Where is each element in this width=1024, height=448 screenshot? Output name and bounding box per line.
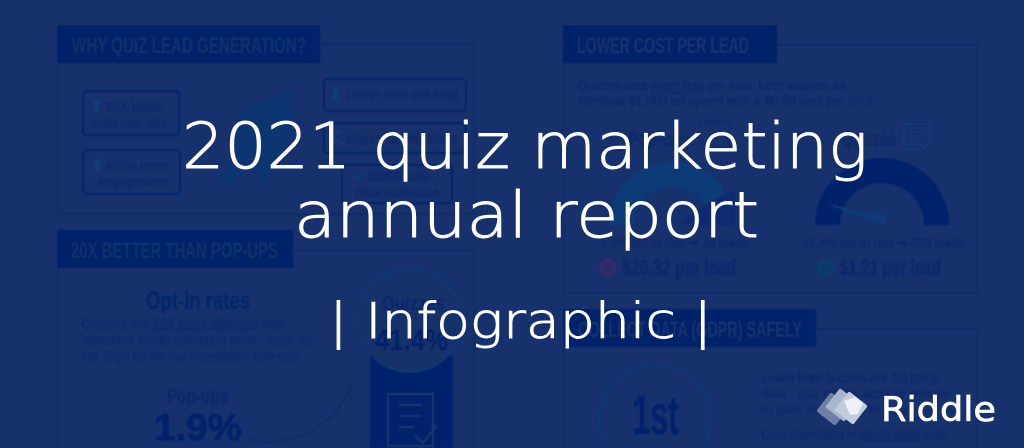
label: pop-ups (628, 122, 728, 151)
badge: quizzes rate: 41.4% (375, 324, 448, 357)
text: first party paragraph: data - quiz takers actively choose (761, 387, 950, 401)
heading: why quiz lead generation (57, 25, 320, 63)
callout: 20X better than pop-ups: 20X better (105, 100, 165, 114)
callout: 20X better than pop-ups (83, 91, 179, 135)
callout: lower cost per lead (324, 79, 466, 111)
label: quizzes (842, 124, 932, 151)
callout: GDPR-safe data collection: GDPR-safe (368, 170, 430, 184)
result: quizzes cost (817, 255, 941, 280)
callout: 20X better than pop-ups: than pop-ups (92, 116, 167, 130)
text: first party paragraph: Quiz marketing is much safer than (761, 428, 948, 442)
heading: collect data safely (563, 309, 816, 347)
title: annual report (294, 179, 759, 252)
panel: lower cost per lead (563, 25, 978, 293)
result: pop-ups cost: $26.32 per lead (622, 255, 736, 280)
badge: quizzes rate (358, 268, 462, 372)
bar: quizzes rate (370, 355, 453, 448)
badge: 1st party data: 1st (632, 383, 679, 446)
callout: higher quality leads (324, 123, 465, 153)
text: opt-in paragraph: 'standard' email collection tools - such as (81, 333, 312, 347)
heading: collect data safely: COLLECT DATA (GDPR) SAFELY (578, 317, 802, 342)
text: opt-in paragraph: the 'Sign up for our newsletter' pop-ups. (81, 349, 302, 363)
callout: 400% more engagement (83, 150, 180, 194)
heading: 20x better than pop-ups (57, 230, 293, 268)
text: first party paragraph (761, 371, 950, 442)
text: opt-in paragraph (81, 317, 312, 363)
heading: opt-in rates: Opt-in rates (146, 287, 250, 315)
gauge: pop-ups (609, 162, 735, 225)
callout: GDPR-safe data collection (342, 165, 452, 203)
text: intro (578, 79, 877, 108)
result: quizzes cost: $1.21 per lead (840, 255, 941, 280)
text: first party paragraph: Leads from quizzes are 1st party (761, 371, 939, 385)
arrow: pop-ups to quizzes (250, 386, 352, 442)
badge: quizzes rate: Quizzes (382, 293, 445, 315)
label: pop-ups rate: Pop-ups (167, 386, 228, 408)
text: intro: identical $1,000 ad spend with a $0.50 cost per click. (578, 94, 877, 108)
gauge: quizzes (815, 158, 949, 225)
text: opt-in paragraph: Quizzes are 20X more effective than (81, 317, 287, 331)
panel: collect data safely (563, 309, 978, 447)
label: pop-ups: Pop-ups (628, 129, 690, 151)
callout: lower cost per lead: Lower cost per lead (346, 88, 458, 102)
subtitle: | Infographic | (329, 293, 712, 350)
callout: 400% more engagement: engagement (98, 175, 169, 189)
title (182, 110, 868, 252)
callout: higher quality leads: Higher quality leads (347, 132, 457, 146)
callout: GDPR-safe data collection: data collection (355, 186, 440, 200)
logo: Riddle (816, 388, 996, 430)
stat: quizzes opt-in: 41.4% opt-in rate ➡ 828 leads (802, 236, 964, 250)
panel: 20x better than pop-ups (57, 230, 474, 448)
panel: why quiz lead generation (57, 25, 474, 214)
logo: Riddle: Riddle (881, 390, 996, 430)
stat: pop-ups opt-in: 1.9% opt-in rate ➡ 38 leads (600, 236, 748, 250)
icon: rocket (217, 90, 294, 190)
label: quizzes: Quizzes (842, 129, 896, 151)
text: intro: Quizzes cost much less per lead. Let's assume an (578, 79, 846, 93)
text: first party paragraph: to give their data to you. (761, 403, 911, 417)
result: pop-ups cost (599, 255, 736, 280)
heading: lower cost per lead (563, 25, 777, 63)
heading: why quiz lead generation: WHY QUIZ LEAD GENERATION? (72, 33, 306, 58)
badge: 1st party data (599, 365, 711, 446)
heading: lower cost per lead: LOWER COST PER LEAD (577, 33, 749, 58)
title: 2021 quiz marketing (182, 110, 868, 183)
heading: 20x better than pop-ups: 20X BETTER THAN POP-UPS (71, 238, 278, 263)
stat: pop-ups 1.9%: 1.9% (154, 407, 242, 448)
callout: 400% more engagement: 400% more (105, 159, 168, 173)
